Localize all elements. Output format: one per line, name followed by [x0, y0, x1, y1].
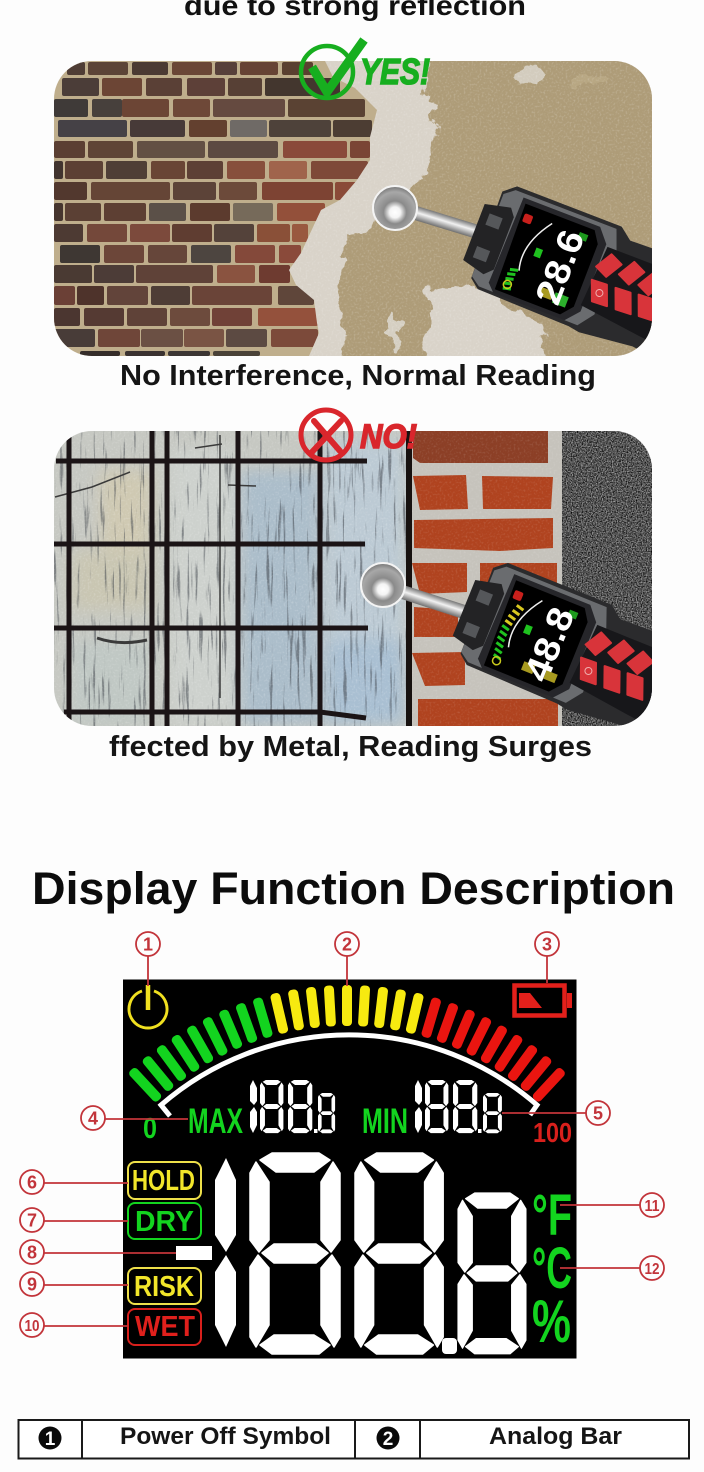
analog bar gauge	[128, 985, 566, 1103]
cracks in the paint	[55, 435, 256, 698]
callouts: 1	[143, 934, 153, 954]
screen reading: 28.6	[527, 224, 592, 310]
minus sign segment	[176, 1246, 212, 1260]
legend badge 1: 1	[45, 1429, 56, 1450]
icon: battery	[514, 986, 572, 1016]
callouts: 2	[342, 934, 352, 954]
status tag: risk: RISK	[134, 1271, 194, 1303]
scale label 0: 0	[143, 1113, 157, 1145]
callouts: 4	[88, 1108, 98, 1128]
brick wall	[54, 61, 394, 356]
legend label: analog bar: Analog Bar	[489, 1423, 622, 1450]
plaster surface	[289, 61, 652, 356]
main reading segments	[215, 1153, 526, 1354]
legend badge 1	[38, 1426, 62, 1450]
min value segments	[415, 1080, 502, 1133]
legend label: power off symbol: Power Off Symbol	[120, 1423, 331, 1450]
legend badge 2	[376, 1426, 400, 1450]
icon: power symbol	[129, 985, 167, 1028]
white gauge arc	[161, 1035, 537, 1116]
unit: percent: %	[532, 1288, 571, 1355]
caption: affected by metal: ffected by Metal, Reading Surges	[109, 731, 592, 763]
probe ball	[373, 186, 417, 230]
moisture meter with probe, reading 28.6	[372, 185, 652, 348]
max label: MAX	[188, 1102, 243, 1141]
status tag: hold: HOLD	[132, 1165, 195, 1197]
yes label: YES!	[360, 51, 430, 92]
max value segments	[250, 1080, 335, 1133]
callouts: 7	[27, 1210, 37, 1230]
callouts: 3	[542, 934, 552, 954]
callouts: 9	[27, 1274, 37, 1294]
probe stem	[401, 586, 466, 618]
yes badge	[301, 40, 430, 98]
legend badge 2: 2	[383, 1429, 393, 1450]
status tag: wet: WET	[135, 1311, 195, 1343]
meter body	[452, 563, 652, 726]
dark granite section	[562, 431, 652, 726]
caption: normal reading: No Interference, Normal Reading	[120, 360, 596, 392]
probe stem	[414, 206, 477, 238]
unit: celsius: °C	[532, 1236, 572, 1301]
legend table	[18, 1420, 689, 1458]
lcd background	[123, 980, 576, 1358]
moisture meter with probe, reading 48.8	[360, 562, 652, 726]
callouts: 10	[24, 1318, 40, 1335]
status tag: dry: DRY	[135, 1206, 194, 1238]
metal grid	[54, 431, 368, 726]
callouts: 8	[27, 1242, 37, 1262]
no badge	[301, 410, 417, 460]
probe ball	[361, 563, 405, 607]
scale label 100: 100	[533, 1117, 572, 1148]
min label: MIN	[362, 1102, 408, 1141]
meter body	[463, 186, 652, 348]
icon: green check mark	[301, 40, 364, 98]
panel: lcd display diagram	[123, 980, 576, 1358]
callouts	[20, 932, 664, 1337]
screen reading: 48.8	[516, 601, 582, 687]
brick wall section	[406, 431, 566, 727]
unit: fahrenheit: °F	[532, 1183, 572, 1248]
callouts: 6	[27, 1172, 37, 1192]
callouts: 5	[593, 1104, 603, 1124]
callouts: 11	[644, 1198, 660, 1215]
icon: red cross mark	[301, 410, 351, 460]
peeling painted wall	[54, 431, 412, 726]
panel: yes, brick wall with plaster	[54, 61, 652, 356]
callouts: 12	[644, 1261, 660, 1278]
no label: NO!	[360, 418, 417, 456]
panel: no, metal mesh wall	[54, 431, 652, 726]
title: display function description: Display Function Description	[32, 863, 675, 914]
